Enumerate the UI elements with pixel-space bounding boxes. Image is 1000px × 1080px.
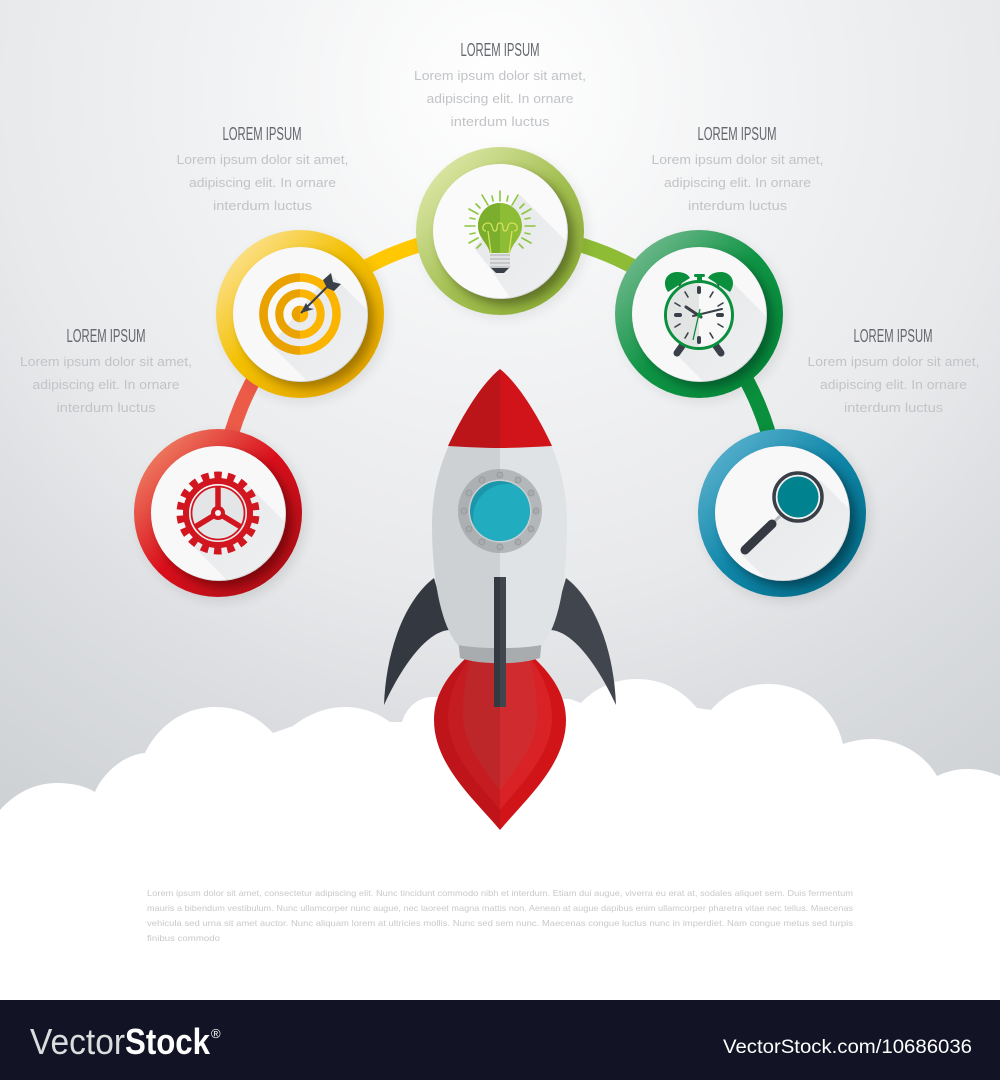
cloud [0,679,1000,1000]
icon: clock [665,272,733,353]
connector: yellow to lime [302,233,500,315]
body paragraph: vehicula sed urna sit amet auctor. Nunc aliquam lorem at ultricies mollis. Nunc sed sem nunc. Maecenas congue luctus nunc in imperdiet. Nam congue metus sed turpis [147,918,853,928]
footer logo: Vector [30,1021,125,1062]
body paragraph: finibus commodo [147,933,220,943]
connector: green to blue [698,315,780,513]
text block: far left [20,326,192,415]
footer logo: Stock [125,1021,211,1062]
body paragraph: mauris a bibendum vestibulum. Nunc ullamcorper nunc augue, nec laoreet magna mattis non. Aenean at augue dapibus enim ullamcorper pharetra vitae nec tellus. Maecenas [147,903,853,913]
text block: far left: interdum luctus [56,400,156,415]
text block: far right: Lorem ipsum dolor sit amet, [808,354,980,369]
text block: right: Lorem ipsum dolor sit amet, [652,152,824,167]
text block: left: interdum luctus [213,198,313,213]
text block: left: Lorem ipsum dolor sit amet, [176,152,348,167]
text block: right [652,124,824,213]
icon: bulb [465,191,535,273]
text block: top [414,40,586,129]
footer logo: ® [211,1026,221,1041]
node: target [216,230,389,403]
text block: top: adipiscing elit. In ornare [426,91,574,106]
body paragraph: Lorem ipsum dolor sit amet, consectetur adipiscing elit. Nunc tincidunt commodo nibh et interdum. Etiam dui augue, viverra eu erat at, sodales aliquet sem. Duis fermentum [147,888,853,898]
connector: red to yellow [220,315,302,513]
icon: magnifying glass [745,473,822,550]
connector arcs [220,233,780,513]
footer bar [0,1000,1000,1080]
text block: right: adipiscing elit. In ornare [664,175,811,190]
rocket flame [434,659,566,830]
text block: top: Lorem ipsum dolor sit amet, [414,68,586,83]
text block: far left: Lorem ipsum dolor sit amet, [20,354,192,369]
text block: left: LOREM IPSUM [222,124,302,144]
text block: far left: LOREM IPSUM [66,326,146,346]
node: gear [134,429,308,604]
rocket nose [448,369,552,448]
text block: left [176,124,348,213]
text block: top: LOREM IPSUM [460,40,540,60]
text block: far right: LOREM IPSUM [854,326,932,346]
footer logo [30,1021,221,1062]
rocket collar [458,638,542,663]
text block: far left: adipiscing elit. In ornare [32,377,180,392]
text block: far right [808,326,980,415]
rocket fins [384,578,616,705]
rocket [384,369,616,830]
rocket body [432,445,567,648]
text block: right: LOREM IPSUM [698,124,776,144]
text block: left: adipiscing elit. In ornare [189,175,336,190]
icon: gear [178,473,258,553]
node: light bulb [416,147,588,319]
body paragraph [147,888,853,943]
text block: top: interdum luctus [450,114,550,129]
text block: right: interdum luctus [688,198,788,213]
text block: far right: adipiscing elit. In ornare [820,377,967,392]
text block: far right: interdum luctus [844,400,944,415]
node: magnifier [698,429,872,604]
rocket porthole [458,469,542,553]
connector: lime to green [500,233,698,315]
footer url: VectorStock.com/10686036 [723,1037,972,1058]
icon: target with arrow [259,273,341,355]
rocket center bar [494,577,506,707]
node: alarm clock [615,230,788,403]
